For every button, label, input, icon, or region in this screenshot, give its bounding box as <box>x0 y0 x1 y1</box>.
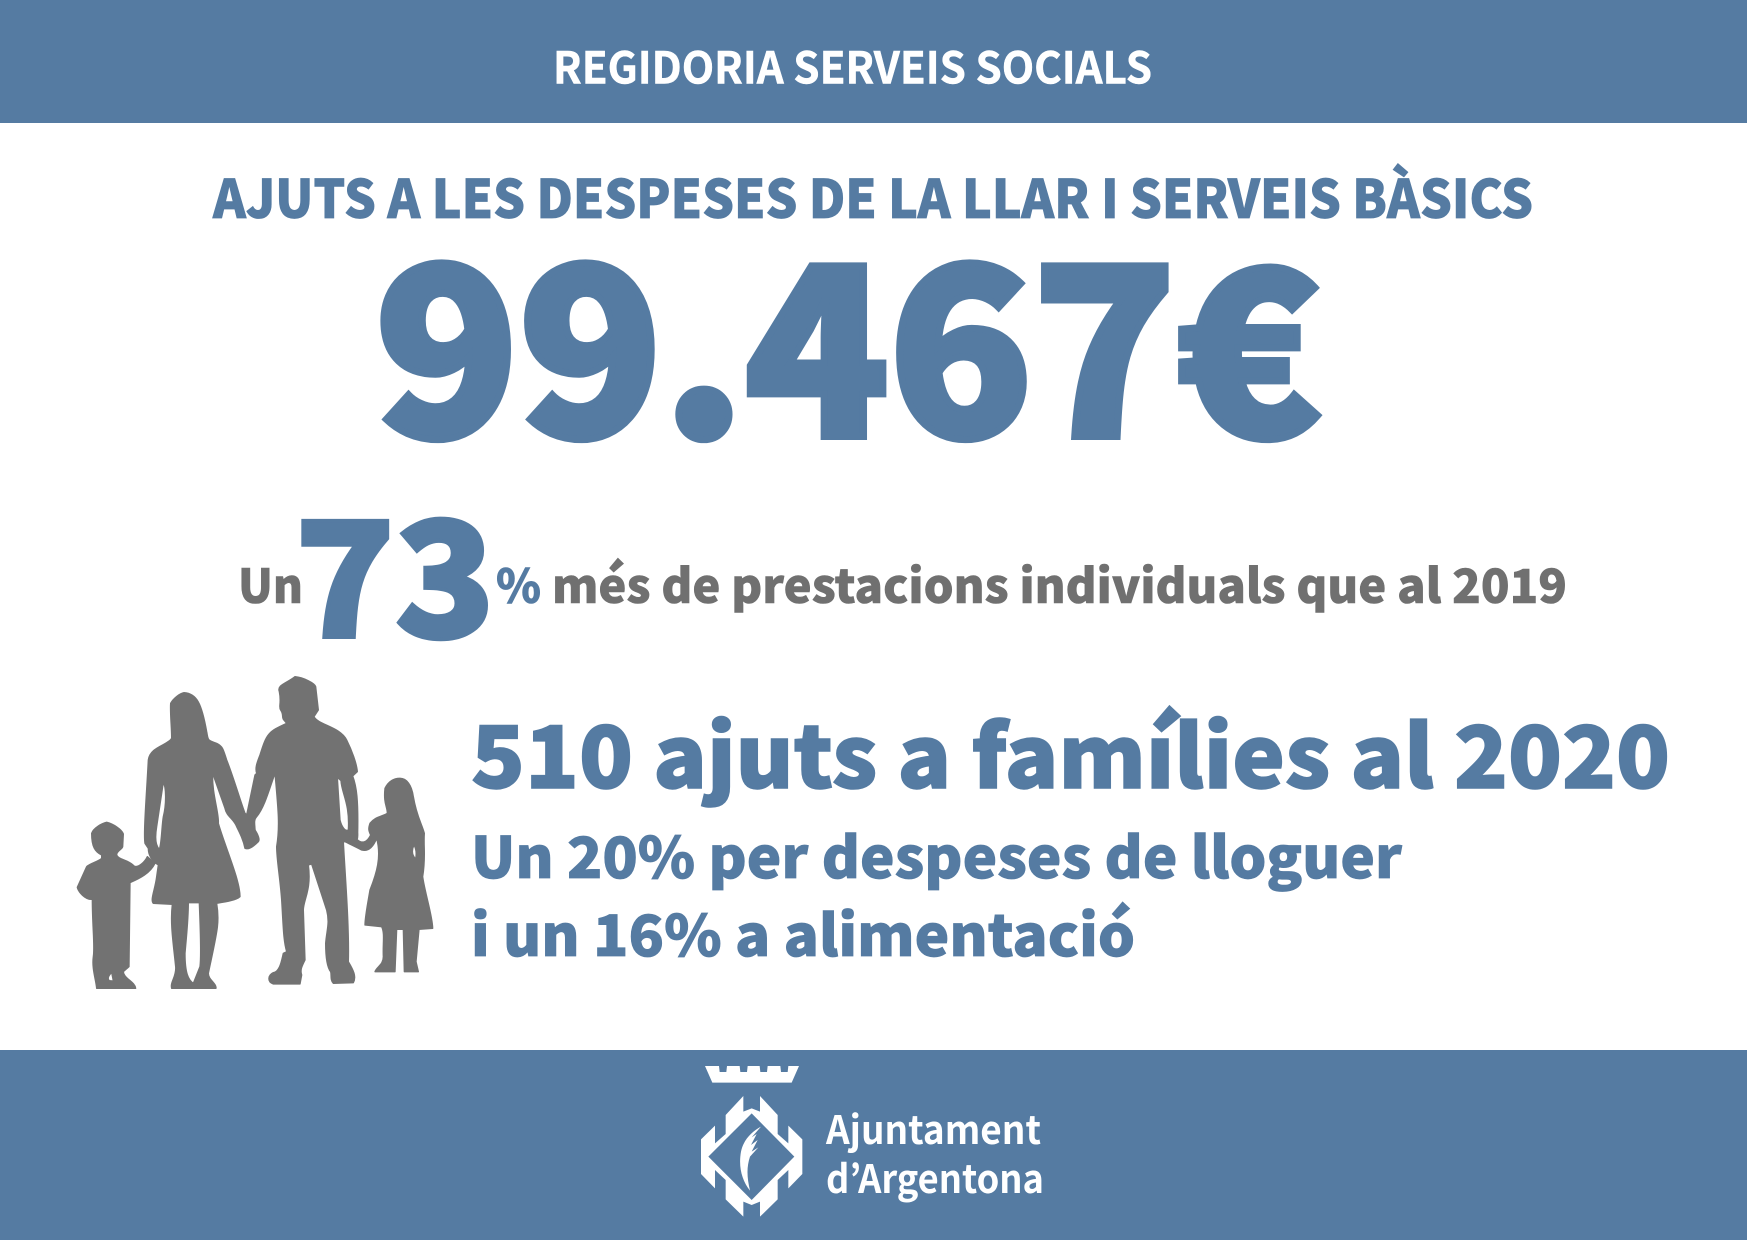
big total amount: 99.467€ <box>375 170 1320 502</box>
food share text: i un 16% a alimentació <box>471 891 1135 973</box>
crown <box>705 1066 799 1083</box>
word: Un: Un <box>238 548 303 617</box>
comparison text: més de prestacions individuals que al 2019 <box>552 548 1567 617</box>
main heading: AJUTS A LES DESPESES DE LA LLAR I SERVEIS BÀSICS <box>212 158 1533 234</box>
feather <box>740 1127 761 1191</box>
girl <box>345 778 433 972</box>
logo text line 2: d’Argentona <box>826 1149 1044 1205</box>
shield diamond <box>708 1113 794 1200</box>
logo text line 1: Ajuntament <box>825 1100 1041 1156</box>
comparison statement <box>238 452 1567 684</box>
mother <box>145 693 259 988</box>
icon: family silhouette <box>77 677 433 988</box>
boy <box>77 822 155 988</box>
big number 73: 73 <box>295 452 495 684</box>
rent share text: Un 20% per despeses de lloguer <box>471 813 1403 895</box>
header banner <box>0 0 1747 123</box>
families headline: 510 ajuts a famílies al 2020 <box>471 688 1670 813</box>
logo: coat of arms <box>701 1066 802 1217</box>
footer banner <box>0 1050 1747 1240</box>
header title: REGIDORIA SERVEIS SOCIALS <box>553 32 1152 96</box>
shield outline <box>701 1096 802 1217</box>
father <box>247 677 358 984</box>
percent sign: % <box>496 548 541 617</box>
